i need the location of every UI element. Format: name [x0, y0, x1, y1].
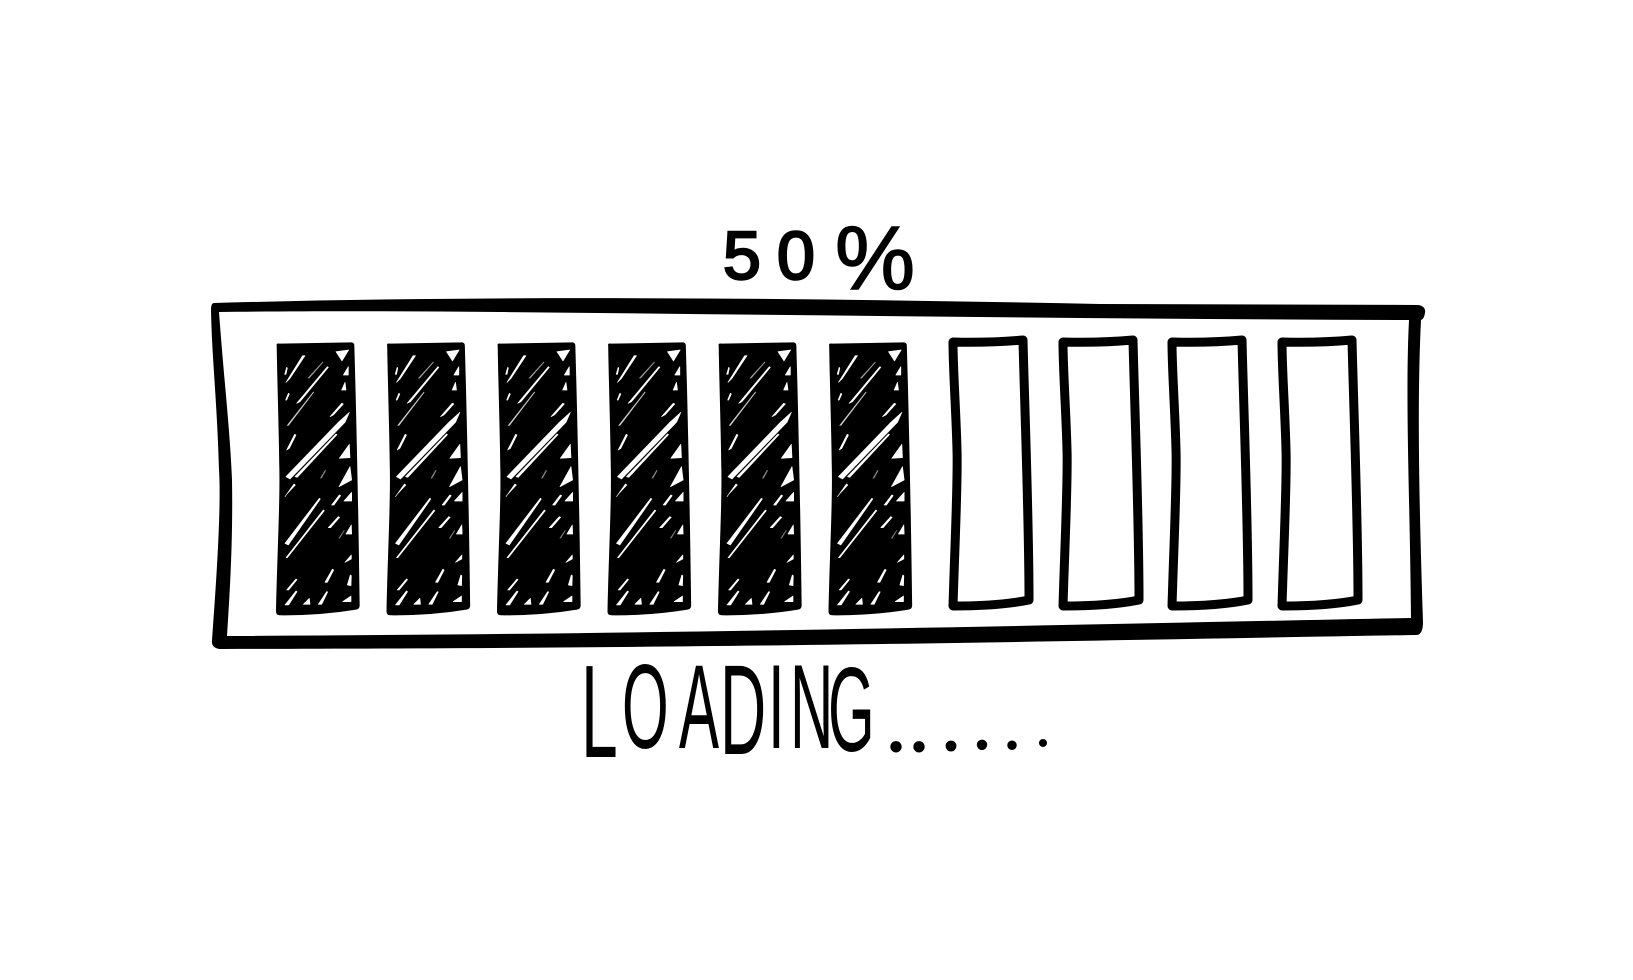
empty segment 10 [1282, 340, 1358, 606]
loading dots: . [971, 672, 993, 769]
loading caption: N [790, 640, 833, 775]
filled segment 3 [497, 342, 581, 615]
empty progress segments [953, 340, 1358, 606]
filled segment 2 [386, 342, 470, 615]
empty segment 8 [1063, 340, 1139, 606]
loading dots: . [907, 665, 931, 772]
loading dots: . [940, 668, 962, 770]
loading dots: . [1002, 679, 1022, 767]
loading caption: I [768, 640, 785, 775]
loading caption: G [828, 643, 875, 778]
filled segment 5 [718, 342, 802, 615]
loading caption: D [720, 639, 766, 782]
filled segment 4 [607, 342, 691, 615]
empty segment 9 [1172, 340, 1248, 606]
loading caption: O [622, 640, 669, 775]
outer frame of progress bar [211, 298, 1425, 649]
loading dots: . [1034, 685, 1052, 761]
loading caption: A [679, 640, 719, 775]
percentage label: 5 [723, 218, 761, 294]
percentage label: 0 [777, 218, 815, 294]
filled segment 6 [828, 342, 912, 615]
percentage label: % [835, 209, 915, 309]
filled progress segments [276, 342, 912, 615]
filled segment 1 [276, 342, 360, 615]
empty segment 7 [953, 340, 1029, 606]
loading caption: L [581, 639, 618, 786]
loading dots: . [884, 665, 908, 772]
